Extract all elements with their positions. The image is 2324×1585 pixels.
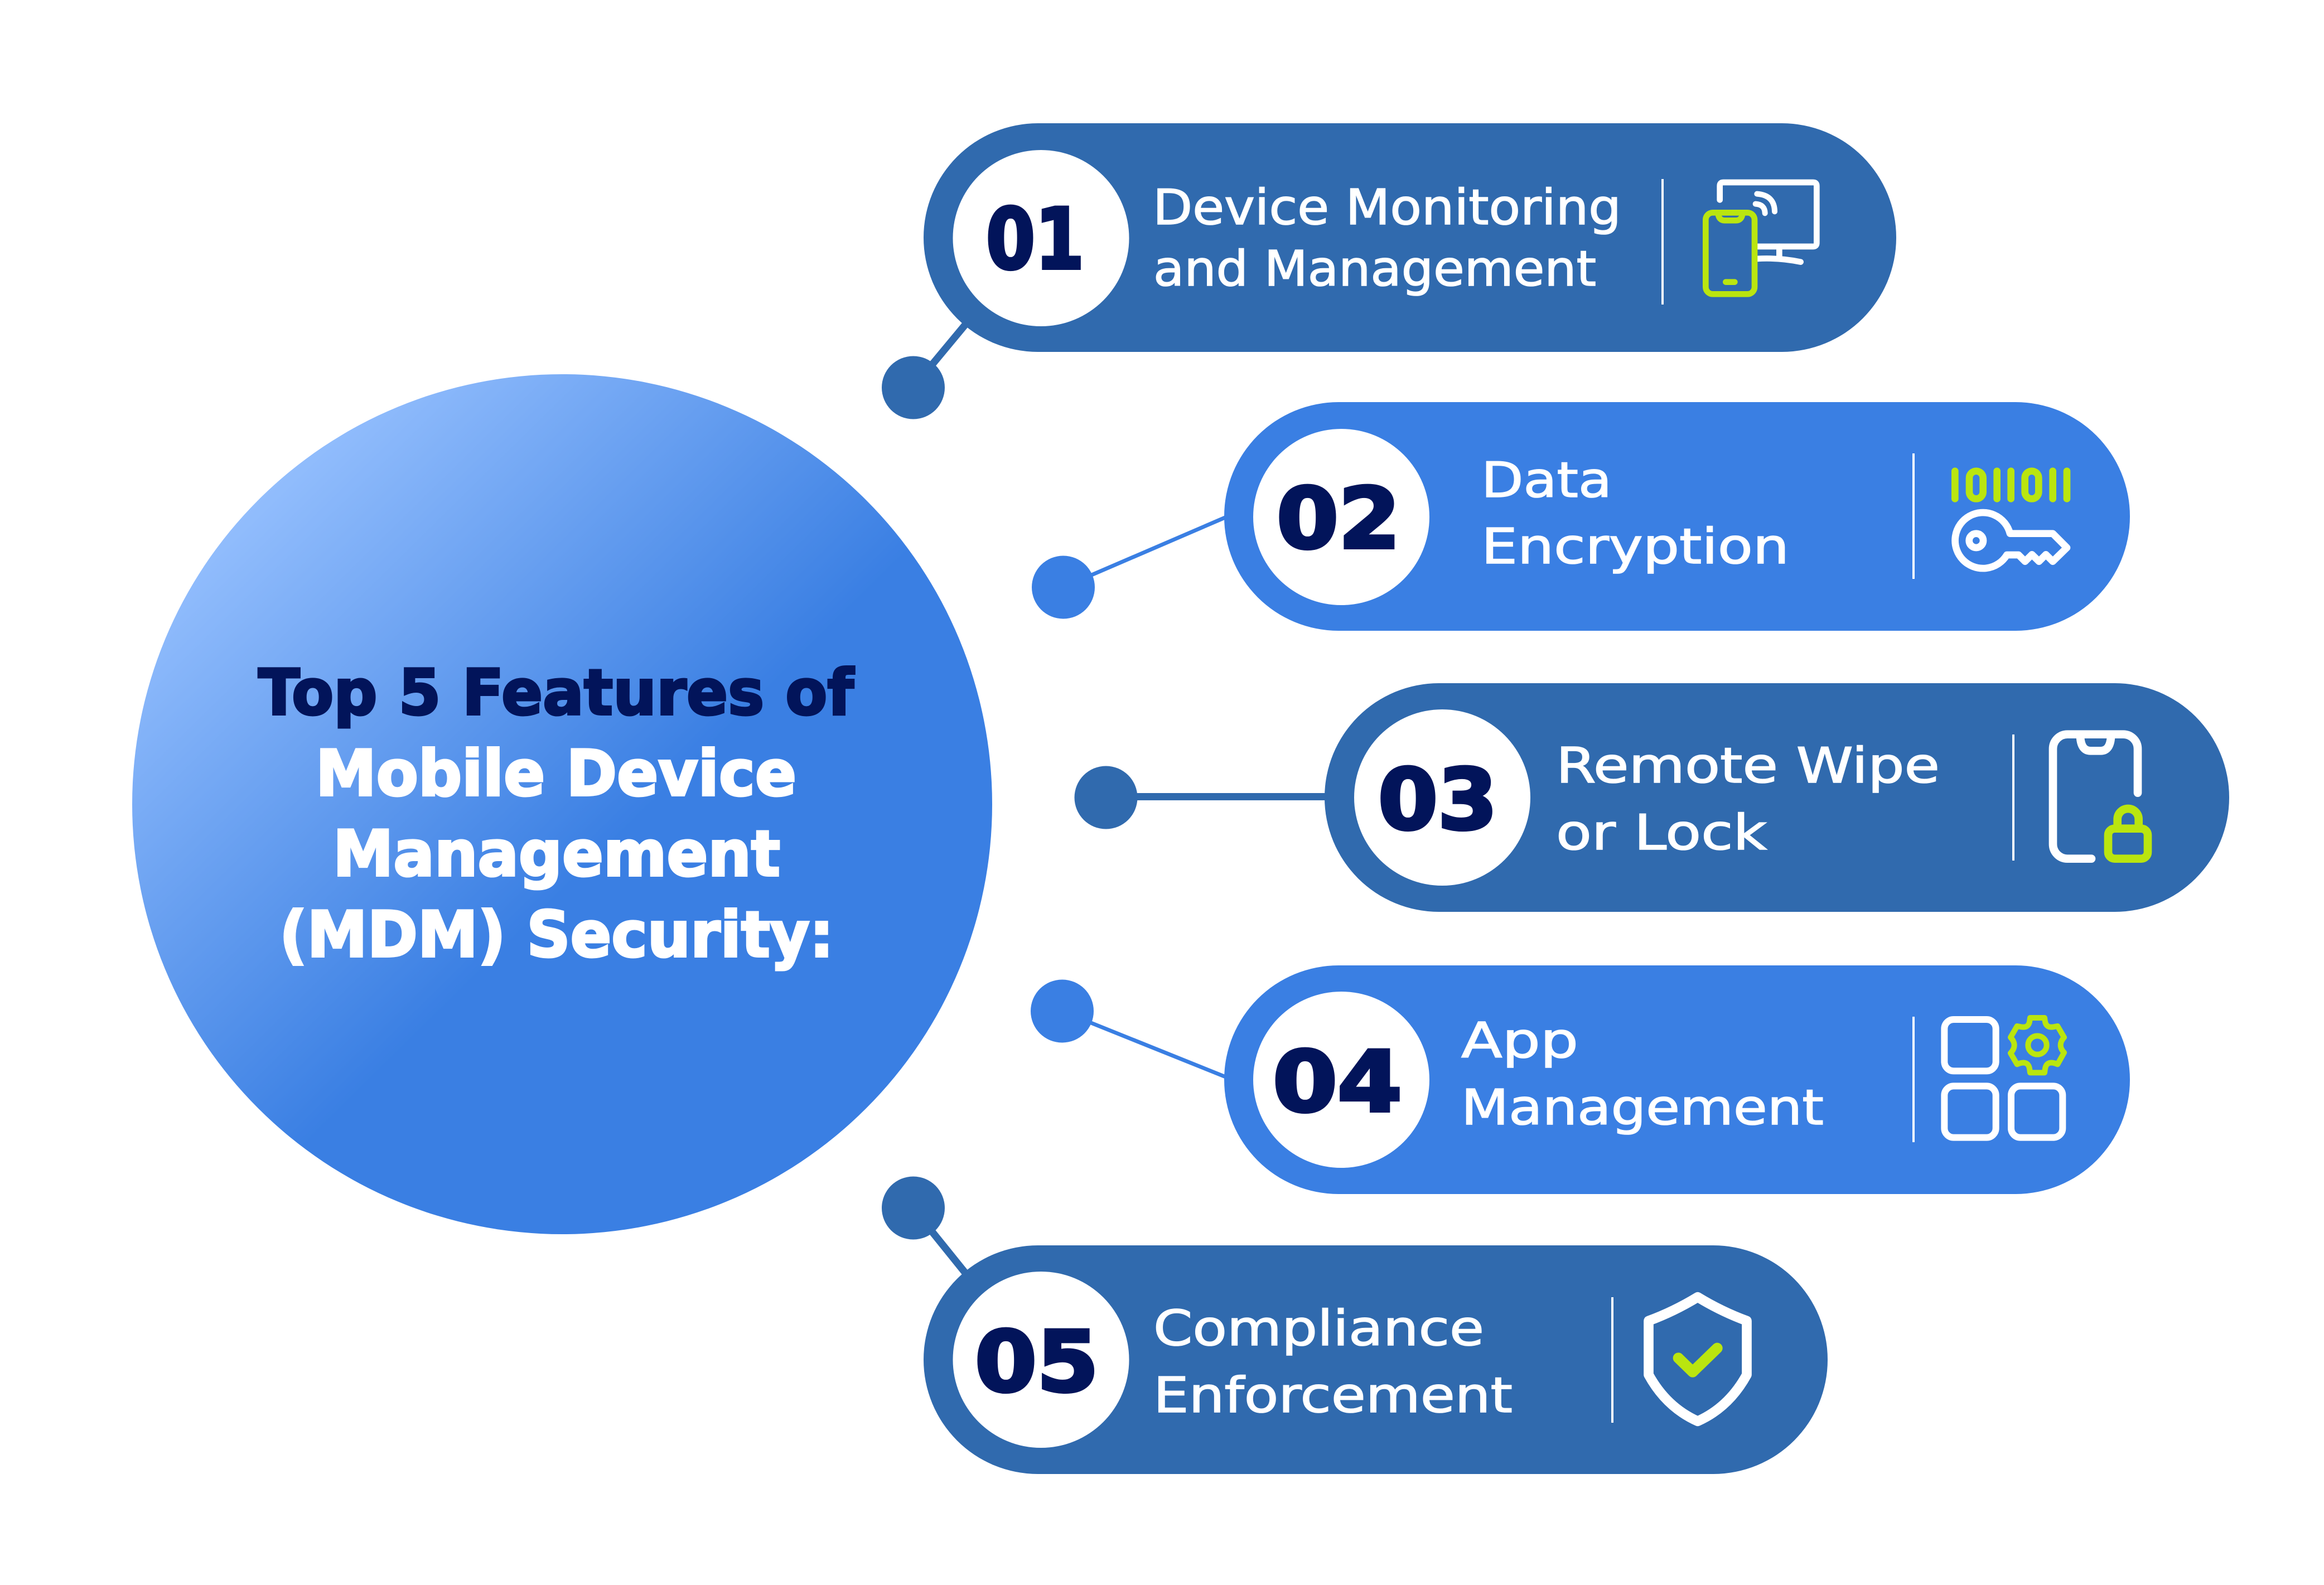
label bbox=[1556, 737, 1940, 861]
icon: app grid with gear bbox=[1944, 1018, 2064, 1138]
label: Device Monitoring bbox=[1153, 179, 1621, 236]
label: App bbox=[1461, 1012, 1578, 1069]
label bbox=[1481, 452, 1789, 575]
number 03: 03 bbox=[1378, 752, 1497, 849]
separator bbox=[1661, 179, 1664, 305]
central circle background bbox=[132, 374, 992, 1234]
title: Mobile Device bbox=[316, 737, 796, 810]
number 05: 05 bbox=[975, 1314, 1099, 1411]
connector: feature 03 bbox=[1074, 766, 1339, 829]
label bbox=[1461, 1012, 1824, 1136]
title bbox=[258, 656, 855, 972]
separator bbox=[1912, 1017, 1915, 1142]
title: (MDM) Security: bbox=[279, 898, 834, 972]
title: Management bbox=[333, 817, 780, 891]
pill background bbox=[924, 123, 1896, 352]
connector: feature 04 bbox=[1031, 979, 1235, 1081]
label: Remote Wipe bbox=[1556, 737, 1940, 794]
connector: feature 05 bbox=[882, 1177, 973, 1283]
number circle bbox=[953, 1272, 1129, 1448]
number circle bbox=[1253, 992, 1429, 1168]
number circle bbox=[1354, 709, 1530, 886]
label bbox=[1153, 1300, 1513, 1424]
connector: feature 01 bbox=[882, 315, 973, 419]
icon: phone with lock bbox=[2053, 734, 2148, 859]
icon: binary key bbox=[1955, 471, 2067, 568]
panel: feature 05 compliance bbox=[924, 1245, 1828, 1474]
panel: feature 04 app management bbox=[1224, 965, 2130, 1194]
panel: central title circle bbox=[132, 374, 992, 1234]
number 02: 02 bbox=[1277, 471, 1400, 568]
label bbox=[1153, 179, 1621, 297]
title: Top 5 Features of bbox=[258, 656, 855, 729]
separator bbox=[1611, 1297, 1613, 1423]
panel: feature 01 device monitoring bbox=[924, 123, 1896, 352]
label: Compliance bbox=[1153, 1300, 1484, 1357]
icon: shield check bbox=[1649, 1297, 1747, 1421]
number 04: 04 bbox=[1273, 1034, 1402, 1131]
number circle bbox=[953, 150, 1129, 326]
icon: monitor and phone bbox=[1705, 182, 1816, 294]
connector: feature 02 bbox=[1032, 513, 1235, 619]
number circle bbox=[1253, 429, 1429, 605]
separator bbox=[2012, 734, 2014, 861]
label: Encryption bbox=[1481, 518, 1789, 575]
number 01: 01 bbox=[986, 191, 1084, 288]
label: Management bbox=[1461, 1079, 1824, 1136]
pill background bbox=[1224, 402, 2130, 631]
pill background bbox=[924, 1245, 1828, 1474]
pill background bbox=[1325, 683, 2229, 912]
label: Data bbox=[1481, 452, 1612, 509]
label: or Lock bbox=[1556, 804, 1767, 861]
pill background bbox=[1224, 965, 2130, 1194]
panel: feature 02 data encryption bbox=[1224, 402, 2130, 631]
panel: feature 03 remote wipe bbox=[1325, 683, 2229, 912]
label: and Management bbox=[1153, 240, 1596, 297]
label: Enforcement bbox=[1153, 1367, 1513, 1424]
separator bbox=[1912, 453, 1915, 579]
